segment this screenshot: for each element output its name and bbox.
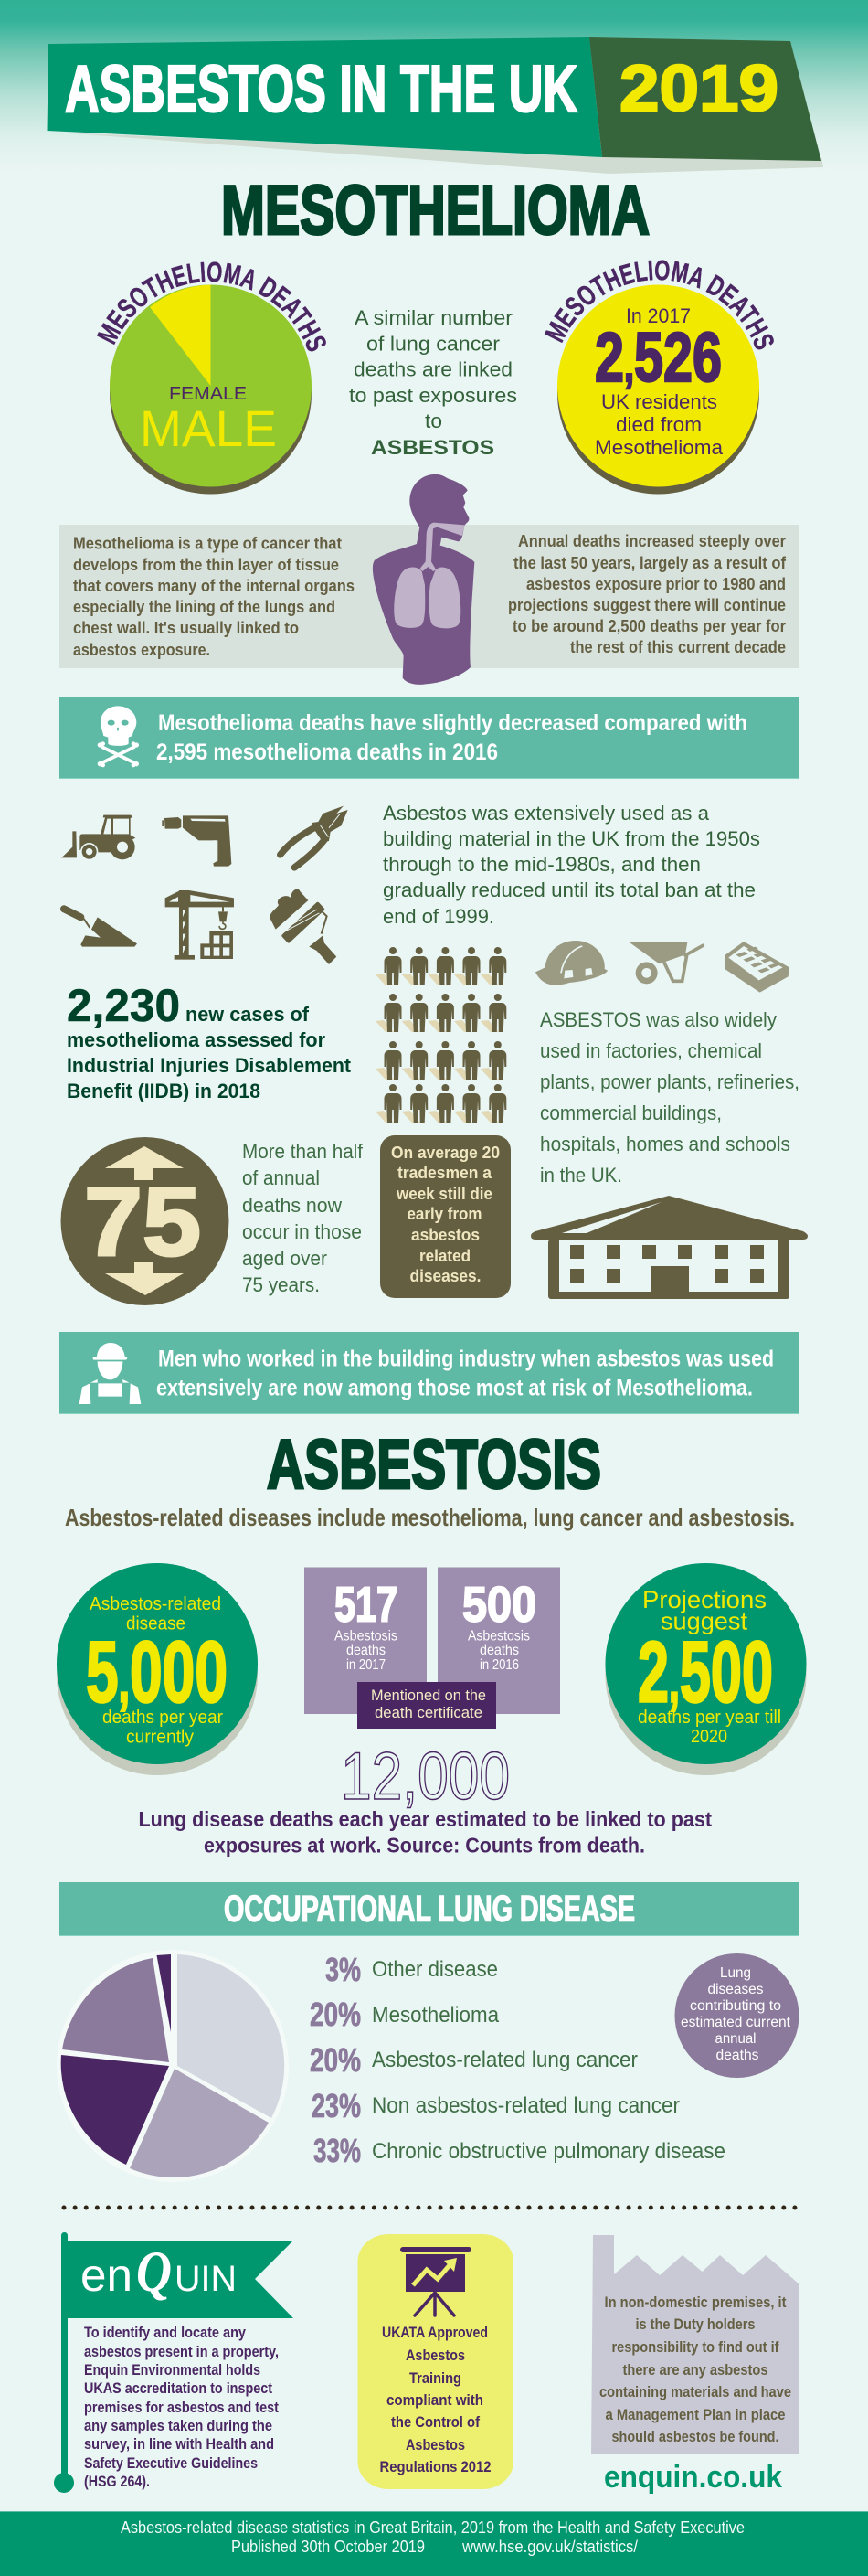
circle: 5,000 deaths: deaths per year [102, 1708, 223, 1728]
text: lung disease deaths: exposures at work. Source: Counts from death. [204, 1834, 645, 1857]
panel: ukata training: UKATA Approved [382, 2324, 488, 2341]
circle: 2,500 projections: Projections [642, 1586, 767, 1613]
text: asbestos widely used [540, 1008, 799, 1187]
stat: 2,230 new cases: mesothelioma assessed for [67, 1028, 325, 1051]
icon: wheelbarrow [630, 942, 703, 984]
legend: disease percentages: 23% [312, 2087, 361, 2124]
callout: tradesmen per week [380, 1135, 511, 1298]
footer: Published 30th October 2019 [231, 2538, 425, 2556]
boxes: asbestosis deaths: in 2017 [346, 1657, 386, 1673]
pie chart: lung disease breakdown [57, 1950, 289, 2182]
callout: tradesmen per week: early from [408, 1205, 482, 1223]
text: enquin accreditation [84, 2324, 279, 2490]
legend: disease percentages: 20% [310, 2041, 361, 2079]
right description text: to be around 2,500 deaths per year for [513, 617, 786, 635]
legend: disease percentages: Chronic obstructive pulmonary disease [372, 2139, 725, 2164]
banner text [156, 1346, 774, 1400]
legend: disease percentages: Non asbestos-related lung cancer [372, 2093, 680, 2118]
callout: lung diseases note: contributing to [690, 1998, 781, 2014]
panel: ukata training: Regulations 2012 [380, 2458, 492, 2475]
title banner [48, 37, 823, 174]
text: enquin accreditation: any samples taken during the [84, 2417, 272, 2434]
icon: worker [79, 1343, 141, 1404]
circle: 2,500 projections: 2020 [691, 1727, 727, 1747]
circle: 2,526 deaths [545, 260, 774, 494]
circle: 5,000 deaths: Asbestos-related [90, 1594, 221, 1614]
centre text: similar number: ASBESTOS [371, 436, 494, 459]
icons: helmet wheelbarrow brick [535, 941, 789, 993]
residents text: UK residents [601, 390, 717, 413]
left description text: chest wall. It's usually linked to [73, 619, 299, 637]
callout: tradesmen per week: diseases. [409, 1267, 481, 1285]
circle: 5,000 deaths: currently [126, 1728, 194, 1748]
panel: factory duty holders: containing materials and have [599, 2383, 791, 2400]
right description text: Annual deaths increased steeply over [518, 532, 786, 550]
right description text: projections suggest there will continue [508, 596, 786, 614]
centre text: similar number: of lung cancer [366, 333, 500, 355]
icon: presentation board [400, 2247, 471, 2315]
badge: 75 with arrows [60, 1137, 228, 1305]
text: extensive use of asbestos: through to the mid-1980s, and then [383, 853, 701, 876]
text: enquin accreditation: premises for asbestos and test [84, 2399, 279, 2416]
text: asbestos widely used: in the UK. [540, 1164, 622, 1187]
text: asbestos widely used: ASBESTOS was also widely [540, 1008, 777, 1031]
icon: brick [725, 942, 789, 993]
text: enquin accreditation: asbestos present in a property, [84, 2343, 279, 2360]
panel: ukata training: Asbestos [406, 2347, 465, 2364]
footer: www.hse.gov.uk/statistics/ [461, 2538, 638, 2556]
callout: lung diseases note: deaths [716, 2048, 759, 2063]
title text: ASBESTOS IN THE UK [65, 53, 577, 126]
text: asbestos widely used: commercial buildings, [540, 1102, 722, 1124]
label: death certificate [357, 1682, 496, 1729]
label: death certificate: Mentioned on the [371, 1687, 486, 1704]
circle: 2,500 projections: deaths per year till [638, 1708, 781, 1728]
pie: male female deaths [97, 261, 326, 494]
logo text: Q [136, 2239, 172, 2304]
centre text: similar number: to [425, 410, 442, 432]
callout: tradesmen per week: week still die [396, 1185, 492, 1203]
text: more than half [242, 1140, 364, 1296]
legend: disease percentages: Asbestos-related lung cancer [372, 2048, 638, 2072]
legend: disease percentages: Mesothelioma [372, 2003, 500, 2028]
boxes: asbestosis deaths: deaths [346, 1643, 386, 1658]
text: asbestos widely used: used in factories, chemical [540, 1039, 762, 1062]
panel: ukata training [358, 2234, 513, 2489]
text: asbestos widely used: hospitals, homes and schools [540, 1133, 790, 1155]
text: enquin accreditation: Safety Executive Guidelines [84, 2454, 258, 2472]
icon: paint roller [270, 889, 336, 964]
male label: MALE [140, 399, 277, 457]
panel: factory duty holders: a Management Plan in place [605, 2406, 786, 2423]
stat: 2,230 new cases [67, 980, 352, 1102]
website: enquin.co.uk [604, 2460, 782, 2495]
heading: mesothelioma: MESOTHELIOMA [221, 172, 650, 250]
legend: disease percentages: 33% [313, 2132, 361, 2169]
female label: FEMALE [169, 384, 247, 404]
callout: lung diseases note: diseases [707, 1982, 764, 1997]
number 517: 517 [334, 1578, 397, 1633]
icon: drill [162, 815, 231, 867]
icon: human torso with lungs [373, 474, 474, 685]
text: more than half: 75 years. [242, 1273, 320, 1296]
boxes: asbestosis deaths: in 2016 [480, 1657, 519, 1673]
banner: men at risk [59, 1332, 799, 1414]
arc label left: MESOTHELIOMA DEATHS [97, 261, 326, 351]
panel: factory duty holders: there are any asbestos [623, 2361, 767, 2379]
text: extensive use of asbestos: Asbestos was extensively used as a [383, 802, 710, 825]
boxes: asbestosis deaths [304, 1567, 560, 1729]
text: extensive use of asbestos: building material in the UK from the 1950s [383, 827, 760, 850]
2,526 number: 2,526 [595, 319, 722, 397]
right description text: the last 50 years, largely as a result of [513, 554, 787, 572]
centre text: similar number: A similar number [355, 306, 513, 329]
panel: ukata training: Training [409, 2369, 461, 2387]
label: death certificate: death certificate [375, 1704, 482, 1721]
legend: disease percentages: 3% [325, 1951, 361, 1988]
legend: disease percentages [310, 1951, 725, 2169]
text: lung disease deaths: Lung disease deaths each year estimated to be linked to past [139, 1807, 712, 1831]
banner text [156, 710, 747, 765]
circle: 5,000 deaths [57, 1563, 258, 1775]
left description text: asbestos exposure. [73, 641, 210, 659]
icon: trowel [64, 909, 137, 947]
panel: factory duty holders: responsibility to find out if [612, 2338, 779, 2356]
centre text: similar number: deaths are linked [354, 358, 513, 380]
circle: 2,500 projections: suggest [661, 1607, 747, 1634]
icon: tractor [61, 815, 135, 860]
left description text: that covers many of the internal organs [73, 577, 355, 595]
banner text: extensively are now among those most at risk of Mesothelioma. [156, 1375, 753, 1400]
icon: crane [165, 890, 234, 960]
callout: tradesmen per week: asbestos [411, 1226, 480, 1244]
logo text: UIN [175, 2259, 237, 2299]
left description text: develops from the thin layer of tissue [73, 556, 339, 574]
callout: lung diseases note [674, 1953, 799, 2078]
panel: ukata training: Asbestos [406, 2436, 465, 2454]
panel: factory duty holders [591, 2235, 799, 2454]
text: more than half: More than half [242, 1140, 364, 1163]
year: 2019 [619, 53, 778, 125]
text: asbestos widely used: plants, power plants, refineries, [540, 1070, 799, 1093]
left description text [73, 535, 355, 659]
in 2017: In 2017 [626, 304, 691, 327]
callout: lung diseases note: annual [715, 2031, 757, 2047]
number 5,000: 5,000 [86, 1623, 228, 1720]
stat: 2,230 new cases: 2,230 [67, 980, 180, 1031]
stat: 2,230 new cases: new cases of [185, 1003, 310, 1026]
text: extensive use of asbestos: gradually reduced until its total ban at the [383, 878, 756, 901]
callout: tradesmen per week: related [419, 1247, 471, 1265]
centre text: similar number: to past exposures [349, 384, 517, 407]
icons: construction tools [61, 806, 348, 964]
text: enquin accreditation: (HSG 264). [84, 2473, 150, 2490]
text: more than half: occur in those [242, 1220, 362, 1243]
boxes: asbestosis deaths: Asbestosis [334, 1629, 397, 1644]
arc label right: MESOTHELIOMA DEATHS [545, 260, 774, 349]
icon: helmet [535, 941, 608, 985]
centre text: similar number [349, 306, 517, 459]
panel: factory duty holders: should asbestos be found. [612, 2428, 778, 2445]
circle: 2,500 projections [605, 1563, 806, 1775]
icon: pliers [281, 806, 348, 868]
stat: 2,230 new cases: Industrial Injuries Disablement [67, 1054, 352, 1077]
text: enquin accreditation: survey, in line with Health and [84, 2435, 274, 2453]
text: more than half: aged over [242, 1247, 327, 1270]
icon: building [531, 1196, 808, 1299]
stat: 12,000 outline number: 12,000 [341, 1740, 510, 1814]
right description text [508, 532, 787, 656]
legend: disease percentages: Other disease [372, 1957, 498, 1982]
text: enquin accreditation: UKAS accreditation to inspect [84, 2379, 272, 2397]
callout: lung diseases note: Lung [720, 1965, 751, 1981]
text: enquin accreditation: Enquin Environmental holds [84, 2361, 260, 2379]
left description text: Mesothelioma is a type of cancer that [73, 535, 342, 553]
text: more than half: of annual [242, 1166, 320, 1189]
heading: asbestosis: ASBESTOSIS [267, 1426, 601, 1504]
boxes: asbestosis deaths: Asbestosis [468, 1629, 530, 1644]
text: lung disease deaths [139, 1807, 712, 1857]
callout: tradesmen per week: On average 20 [391, 1144, 500, 1162]
footer [0, 2511, 868, 2576]
text: extensive use of asbestos: end of 1999. [383, 905, 494, 928]
banner: deaths decreased [59, 697, 799, 779]
boxes: asbestosis deaths: deaths [480, 1643, 519, 1658]
circle: 5,000 deaths: disease [126, 1614, 185, 1634]
banner text: Men who worked in the building industry when asbestos was used [158, 1346, 774, 1371]
legend: disease percentages: 20% [310, 1996, 361, 2033]
panel: factory duty holders: is the Duty holders [636, 2315, 755, 2333]
number 500: 500 [462, 1578, 536, 1633]
flag: enquin logo [54, 2232, 293, 2493]
banner text: Mesothelioma deaths have slightly decreased compared with [158, 710, 747, 736]
residents text: died from [616, 413, 702, 436]
icon grid: tradesmen [376, 947, 506, 1123]
number 2,500: 2,500 [638, 1623, 773, 1720]
left description text: especially the lining of the lungs and [73, 598, 335, 616]
text: more than half: deaths now [242, 1194, 342, 1217]
banner text: 2,595 mesothelioma deaths in 2016 [156, 740, 498, 765]
panel: mesothelioma description [59, 525, 799, 668]
right description text: asbestos exposure prior to 1980 and [526, 575, 786, 593]
banner: occupational lung disease: OCCUPATIONAL LUNG DISEASE [224, 1889, 635, 1929]
residents text [595, 390, 724, 459]
callout: lung diseases note: estimated current [681, 2015, 791, 2030]
panel: factory duty holders: In non-domestic premises, it [605, 2294, 787, 2311]
panel: ukata training: compliant with [386, 2391, 483, 2409]
callout: tradesmen per week: tradesmen a [397, 1164, 492, 1182]
residents text: Mesothelioma [595, 436, 724, 459]
text: extensive use of asbestos [383, 802, 760, 928]
banner: occupational lung disease [59, 1882, 799, 1936]
logo text: en [80, 2250, 132, 2301]
right description text: the rest of this current decade [570, 638, 786, 656]
number 75: 75 [84, 1166, 201, 1276]
panel: ukata training: the Control of [391, 2413, 480, 2431]
footer: Asbestos-related disease statistics in Great Britain, 2019 from the Health and Safety Executive [121, 2518, 745, 2537]
icon: skull and crossbones [98, 706, 139, 767]
text: enquin accreditation: To identify and locate any [84, 2324, 246, 2341]
logo text [80, 2239, 237, 2304]
stat: 2,230 new cases: Benefit (IIDB) in 2018 [67, 1080, 260, 1102]
